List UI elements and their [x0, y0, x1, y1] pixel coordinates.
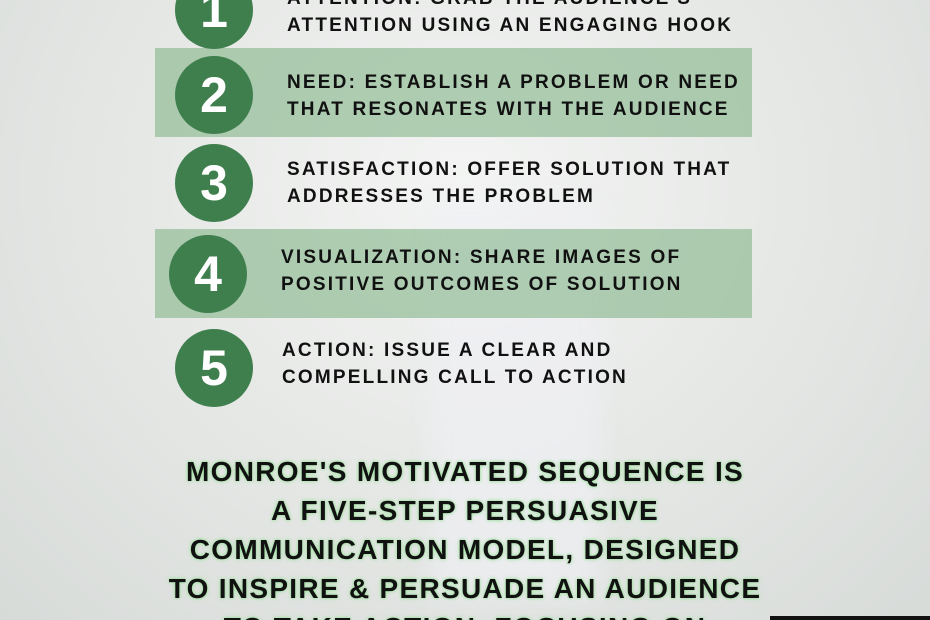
- summary text: MONROE'S MOTIVATED SEQUENCE IS: [186, 456, 744, 487]
- circle 3: 3: [200, 155, 228, 211]
- band: step 2: [155, 48, 752, 137]
- text 3: ADDRESSES THE PROBLEM: [287, 186, 595, 207]
- step 2: [175, 56, 740, 134]
- text 3: [287, 159, 731, 207]
- circle 4: [169, 235, 247, 313]
- circle 5: [175, 329, 253, 407]
- circle 2: [175, 56, 253, 134]
- stage figure haze: [430, 200, 600, 600]
- text 4: [281, 247, 683, 295]
- text 2: THAT RESONATES WITH THE AUDIENCE: [287, 99, 730, 120]
- summary text: [167, 456, 761, 620]
- circle 4: 4: [194, 246, 222, 302]
- step 4: [169, 235, 683, 313]
- summary text: COMMUNICATION MODEL, DESIGNED: [190, 534, 740, 565]
- text 4: VISUALIZATION: SHARE IMAGES OF: [281, 247, 681, 268]
- circle 3: [175, 144, 253, 222]
- text 2: NEED: ESTABLISH A PROBLEM OR NEED: [287, 72, 740, 93]
- text 5: ACTION: ISSUE A CLEAR AND: [282, 340, 612, 361]
- text 3: SATISFACTION: OFFER SOLUTION THAT: [287, 159, 731, 180]
- step 3: [175, 144, 731, 222]
- circle 1: [175, 0, 253, 49]
- text 1: ATTENTION USING AN ENGAGING HOOK: [287, 15, 733, 36]
- step 5: [175, 329, 628, 407]
- circle 5: 5: [200, 340, 228, 396]
- circle 2: 2: [200, 67, 228, 123]
- summary text: A FIVE-STEP PERSUASIVE: [271, 495, 659, 526]
- text 5: [282, 340, 628, 388]
- text 2: [287, 72, 740, 120]
- step 1: [175, 0, 733, 49]
- band: step 4: [155, 229, 752, 318]
- text 4: POSITIVE OUTCOMES OF SOLUTION: [281, 274, 683, 295]
- text 1: [287, 0, 733, 36]
- text 5: COMPELLING CALL TO ACTION: [282, 367, 628, 388]
- summary text: TO INSPIRE & PERSUADE AN AUDIENCE: [169, 573, 761, 604]
- dark corner box: [770, 616, 930, 620]
